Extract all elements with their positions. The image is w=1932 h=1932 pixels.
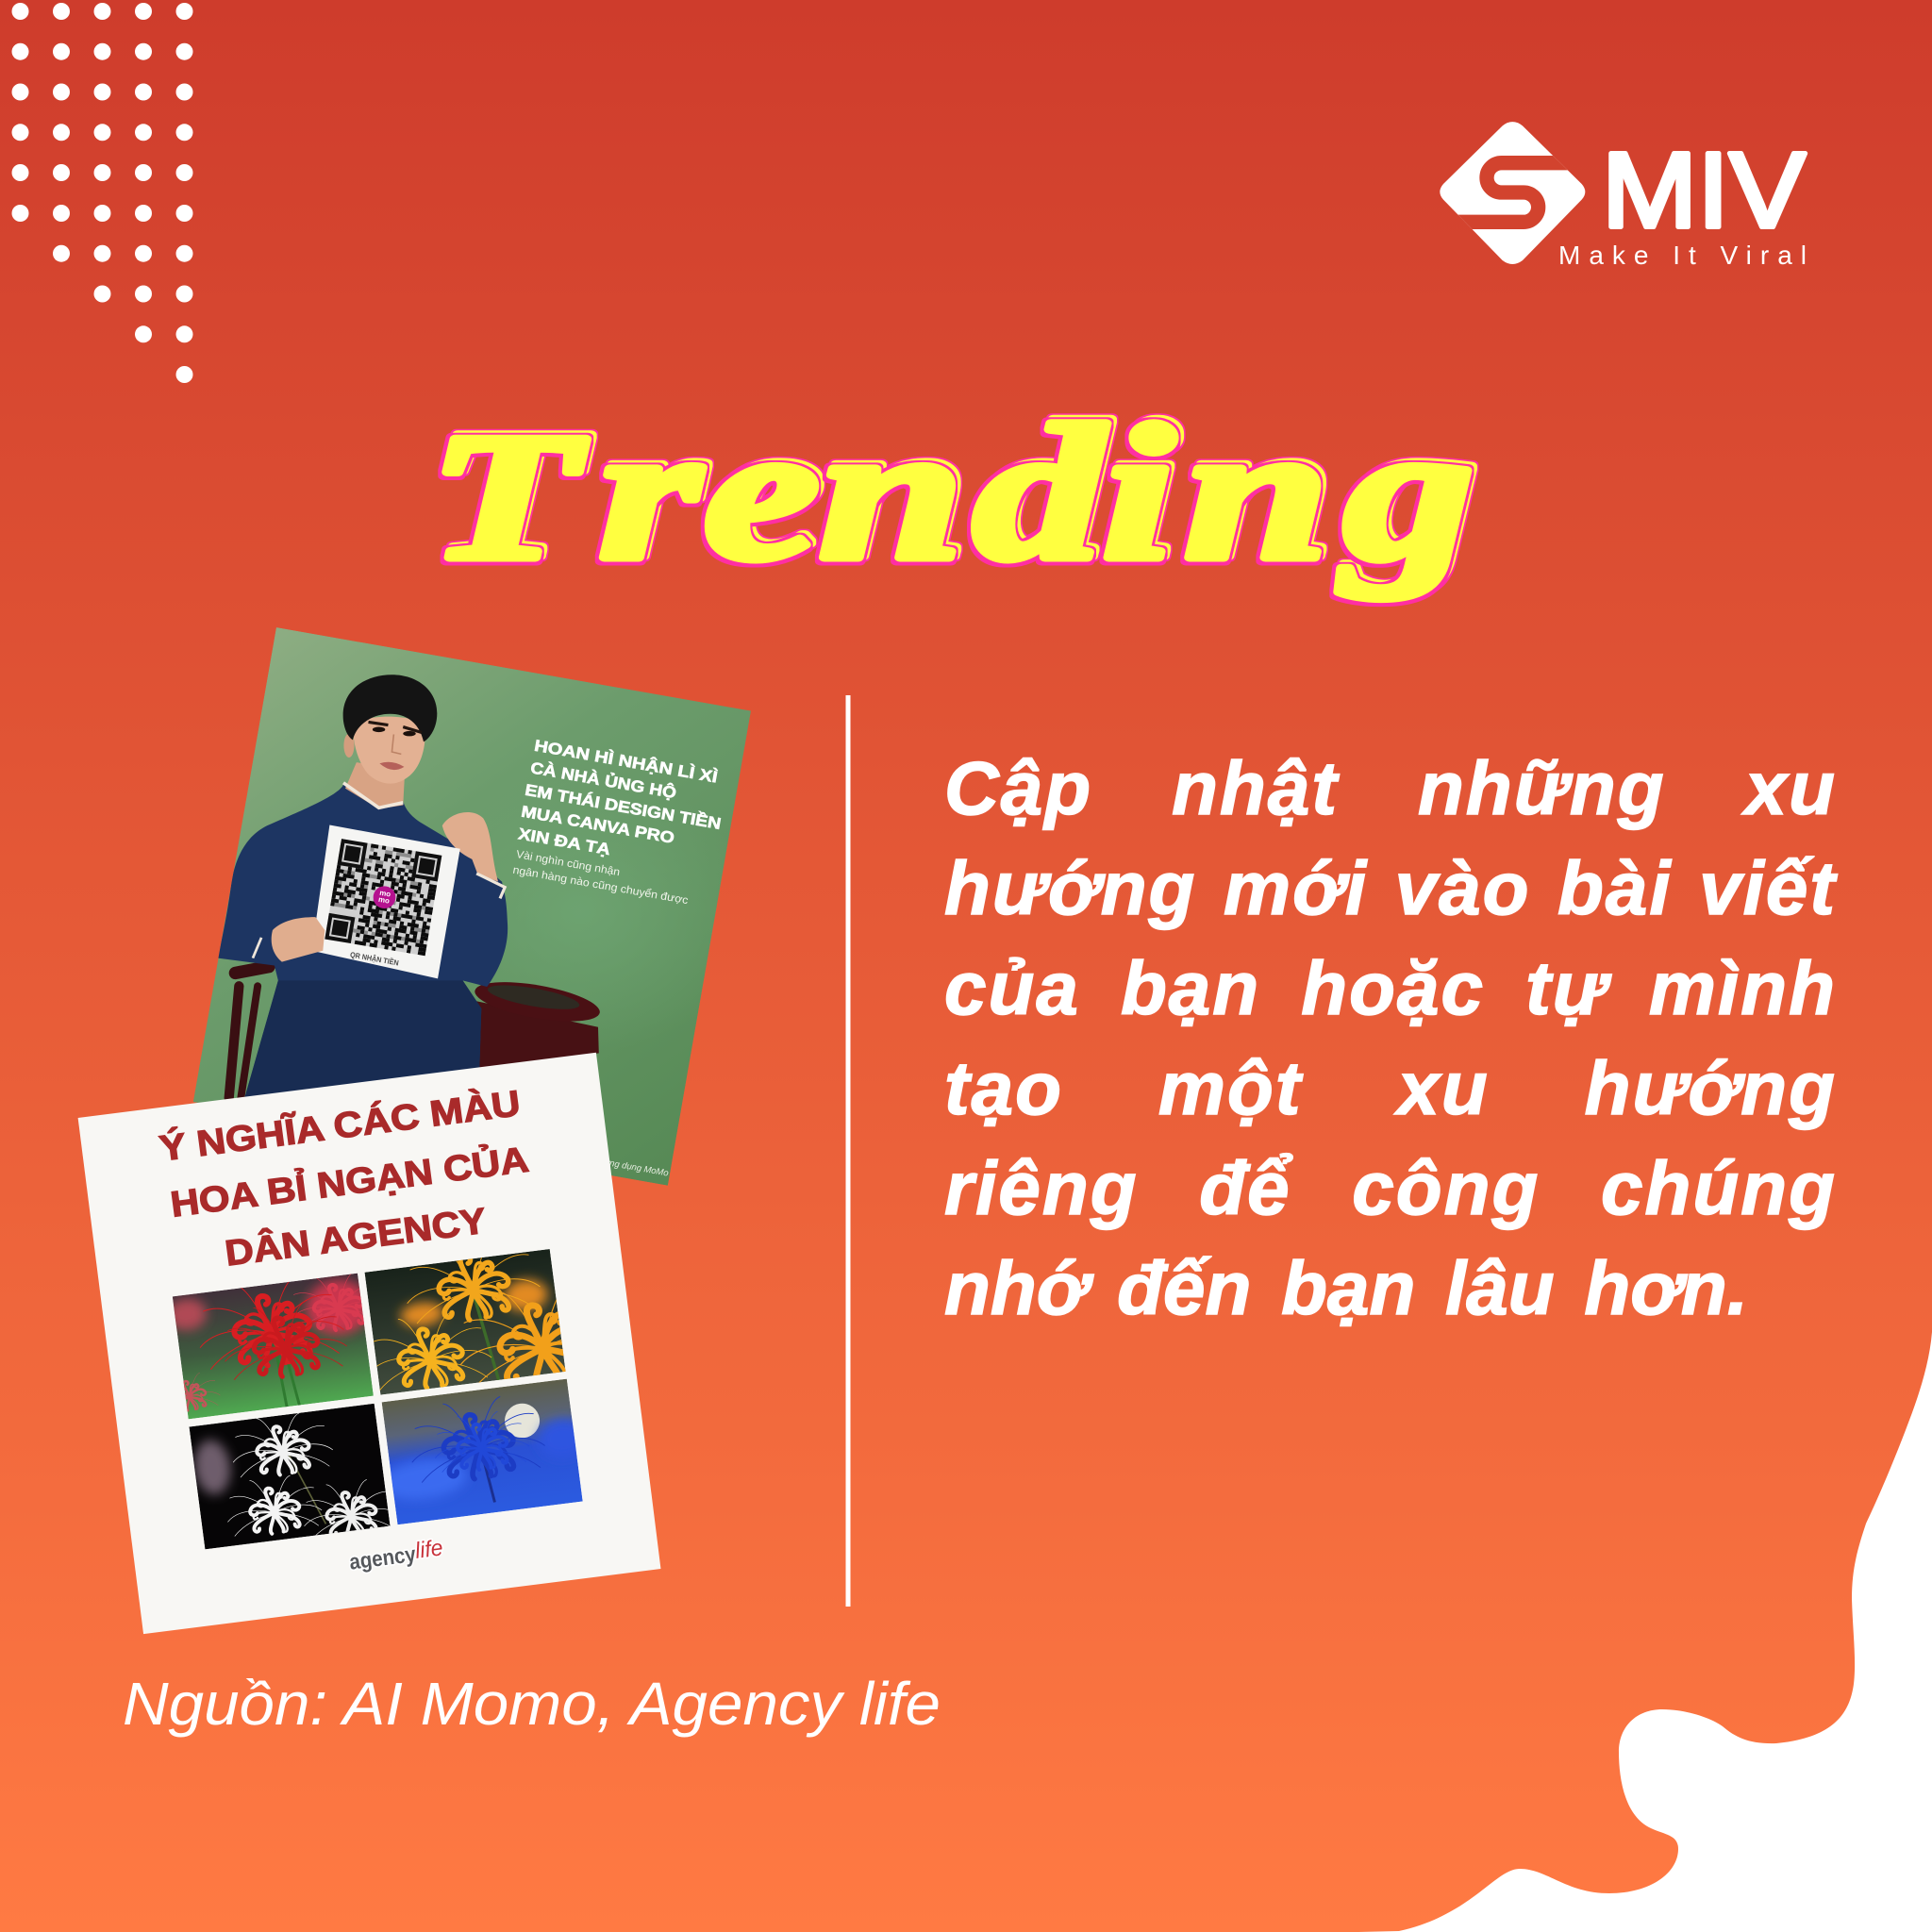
MoMo badge: mo [377,895,391,906]
poster headline: EM THÁI DESIGN TIỀN [524,781,723,833]
stool [475,982,600,1068]
body text: của bạn hoặc tự mình [944,946,1837,1030]
poster subtext: ngân hàng nào cũng chuyển được [512,865,690,907]
body text: tạo một xu hướng [944,1046,1837,1130]
poster heading: DÂN AGENCY [223,1200,489,1274]
agencylife logo: agency [348,1541,417,1574]
body text [944,746,1839,1330]
panel: flower poster [78,1053,660,1634]
photo: blue spider lily [370,1377,594,1526]
chair [229,967,269,1098]
panel: MoMo QR poster [193,627,752,1186]
man in navy ao dai [218,675,508,1098]
icon: diamond S mark [1440,122,1585,264]
logo wordmark: MIV [1602,130,1806,249]
MoMo badge: mo [379,889,391,899]
SMIV logo [1427,122,1807,270]
vertical divider [845,695,851,1607]
poster heading: HOA BỈ NGẠN CỦA [168,1139,531,1225]
body text: hướng mới vào bài viết [944,846,1837,930]
paper sheet [78,1053,660,1634]
logo tagline: Make It Viral [1558,241,1807,270]
body text: nhớ đến bạn lâu hơn. [944,1246,1748,1330]
white wavy corner shape [1358,1332,1932,1932]
poster heading [157,1082,531,1274]
poster headline: XIN ĐA TẠ [517,824,612,858]
poster headline: HOAN HÌ NHẬN LÌ XÌ [533,737,719,787]
source credit: Nguồn: AI Momo, Agency life [123,1670,941,1738]
decorative dot grid [11,3,192,383]
left hand over card [272,917,325,962]
body text: Cập nhật những xu [944,746,1837,830]
photo: white spider lily [189,1402,401,1557]
poster footnote: Dùng ứng dụng MoMo [580,1153,669,1179]
title: T [430,397,587,597]
poster headline: CÀ NHÀ ỦNG HỘ [529,758,677,802]
agencylife logo: life [413,1536,444,1564]
QR code [325,839,441,956]
poster headline: MUA CANVA PRO [520,803,675,847]
poster heading: Ý NGHĨA CÁC MÀU [157,1082,523,1169]
QR caption: QR NHẬN TIỀN [349,950,400,968]
title: rending [599,386,1474,600]
photo: red spider lily [145,1266,397,1423]
MoMo badge [374,886,395,908]
poster green backdrop [193,627,751,1186]
poster subtext: Vài nghìn cũng nhận [515,849,621,878]
QR card [311,825,460,978]
body text: riêng để công chúng [944,1146,1837,1230]
poster subtext [512,849,690,907]
poster headline [517,737,723,858]
photo: yellow spider lily [355,1224,630,1408]
